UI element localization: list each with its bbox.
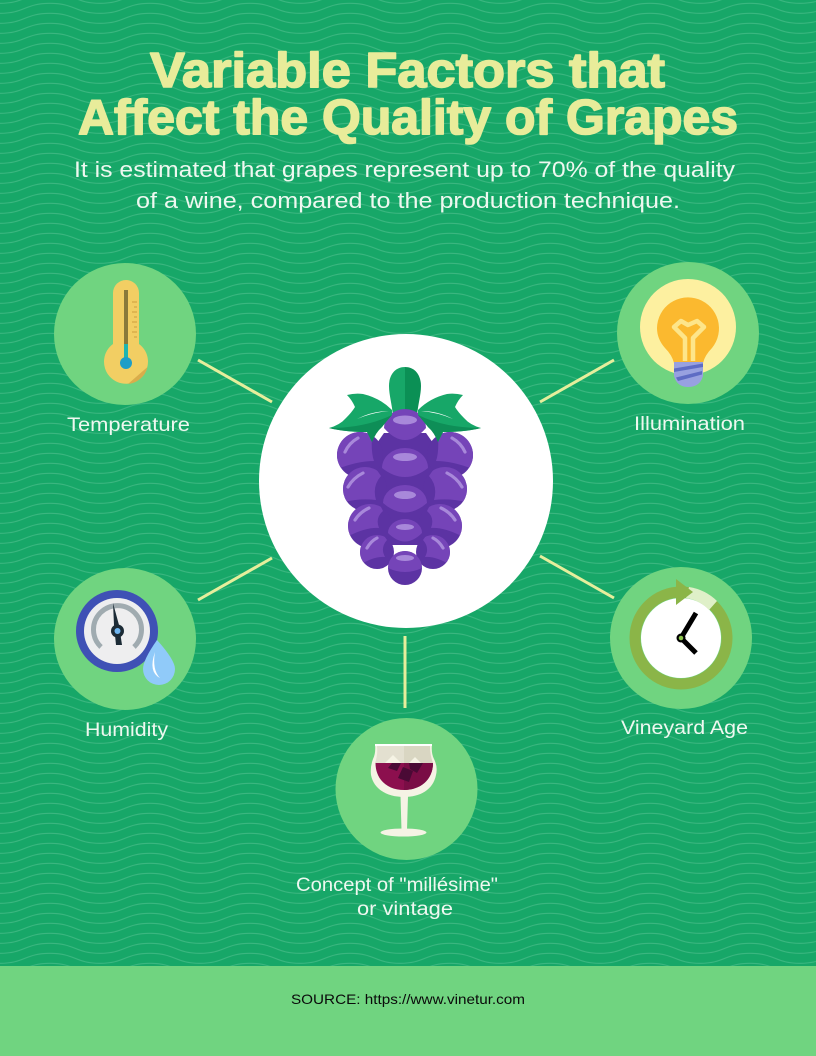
icon: thermometer	[104, 280, 148, 384]
footer band	[0, 966, 816, 1056]
icon: wine glass	[371, 744, 437, 836]
label: or vintage	[357, 899, 453, 920]
factor: illumination	[617, 262, 759, 435]
icon: light bulb	[640, 279, 736, 387]
subtitle: of a wine, compared to the production technique.	[136, 188, 680, 213]
title: Affect the Quality of Grapes	[78, 91, 738, 145]
source text: SOURCE: https://www.vinetur.com	[291, 991, 525, 1007]
label: Vineyard Age	[621, 718, 748, 739]
connector lines	[198, 360, 614, 708]
label: Humidity	[85, 720, 169, 741]
icon: gauge and water drop	[76, 590, 175, 685]
subtitle	[74, 157, 736, 213]
icon: clock with arrow	[635, 579, 727, 684]
label	[296, 875, 498, 920]
factor: vintage	[296, 718, 498, 920]
label: Concept of "millésime"	[296, 875, 498, 896]
subtitle: It is estimated that grapes represent up to 70% of the quality	[74, 157, 736, 182]
factor: temperature	[54, 263, 196, 436]
title: Variable Factors that	[150, 44, 665, 98]
central circle with grapes	[259, 334, 553, 628]
label: Illumination	[634, 414, 745, 435]
factor: vineyard age	[610, 567, 752, 739]
title	[78, 44, 738, 145]
factor: humidity	[54, 568, 196, 741]
label: Temperature	[67, 415, 190, 436]
icon: grape bunch	[329, 367, 481, 585]
